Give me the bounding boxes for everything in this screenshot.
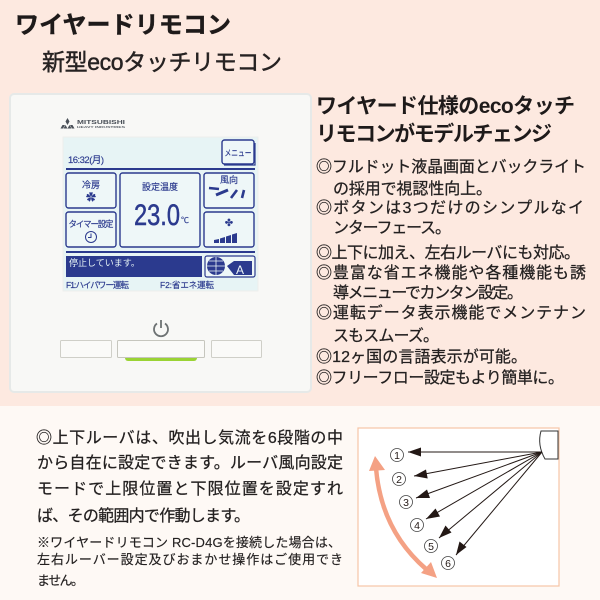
menu button: メニュー: [224, 148, 252, 158]
louver description: [36, 429, 343, 525]
LCD screen: [63, 137, 258, 291]
status message: [66, 256, 202, 277]
language button: A: [236, 263, 244, 277]
cooling button: [66, 173, 116, 208]
status message: 停止しています。: [69, 257, 140, 268]
feature list: ◎ボタンは3つだけのシンプルなイ: [316, 199, 584, 217]
feature list: スもスムーズ。: [333, 327, 439, 345]
indoor unit: [540, 431, 558, 459]
louver description: ◎上下ルーバは、吹出し気流を6段階の中: [36, 429, 343, 447]
feature list: [316, 158, 586, 387]
air direction button: 風向: [220, 174, 238, 185]
set temperature: 設定温度: [142, 181, 178, 192]
note: [37, 535, 343, 588]
feature list: ◎12ヶ国の言語表示が可能。: [316, 348, 527, 366]
brand logo: [60, 118, 126, 129]
top background: [0, 0, 600, 406]
title: ワイヤードリモコン: [15, 12, 231, 39]
hardware buttons: [60, 340, 262, 361]
feature list: の採用で視認性向上。: [333, 180, 492, 198]
note: 左右ルーバー設定及びおまかせ操作はご使用でき: [37, 552, 343, 567]
louver description: ば、その範囲内で作動します。: [37, 507, 250, 525]
diagram frame: [358, 428, 559, 586]
range double arrow: [369, 456, 437, 578]
position numbers: 4: [414, 520, 420, 532]
feature heading: リモコンがモデルチェンジ: [316, 122, 552, 146]
LCD screen: F2:省エネ運転: [160, 280, 214, 290]
position numbers: 3: [403, 497, 409, 509]
brand logo: HEAVY INDUSTRIES: [77, 125, 125, 129]
feature list: ◎フルドット液晶画面とバックライト: [316, 158, 586, 176]
louver diagram: [358, 428, 559, 586]
timer button: タイマー設定: [68, 219, 114, 229]
brand logo: MITSUBISHI: [77, 120, 126, 126]
language button: [205, 256, 255, 277]
note: ません。: [37, 573, 84, 588]
panel: remote controller: [10, 94, 311, 392]
louver description: から自在に設定できます。ルーバ風向設定: [37, 454, 343, 472]
position numbers: 5: [428, 541, 434, 553]
position numbers: 6: [445, 558, 451, 570]
louver description: モードで上限位置と下限位置を設定すれ: [37, 480, 343, 498]
fan speed button: [204, 212, 254, 247]
menu button: [222, 140, 255, 165]
fan speed button: ✤: [225, 218, 233, 229]
cooling button: ✿: [86, 192, 96, 204]
timer button: [66, 212, 116, 247]
feature heading: [316, 95, 575, 146]
note: ※ワイヤードリモコン RC-D4Gを接続した場合は、: [37, 535, 341, 550]
feature list: ◎フリーフロー設定もより簡単に。: [316, 369, 564, 387]
feature heading: ワイヤード仕様のecoタッチ: [316, 95, 575, 118]
feature list: ◎上下に加え、左右ルーバにも対応。: [316, 244, 580, 262]
subtitle: 新型ecoタッチリモコン: [42, 49, 282, 75]
position numbers: 1: [394, 450, 400, 462]
feature list: 導メニューでカンタン設定。: [333, 283, 523, 302]
remote body: [10, 94, 311, 392]
set temperature: ℃: [181, 216, 189, 225]
airflow arrows: [408, 448, 542, 555]
position numbers: [390, 448, 454, 570]
feature list: ◎豊富な省エネ機能や各種機能も誘: [316, 264, 586, 282]
icon: power: [154, 320, 168, 336]
clock: 16:32(月): [68, 155, 104, 166]
function key labels: F1:ハイパワー運転: [66, 280, 129, 290]
set temperature: [120, 173, 200, 247]
cooling button: 冷房: [82, 179, 100, 190]
bottom background: [0, 406, 600, 600]
air direction button: [204, 173, 254, 208]
feature list: ◎運転データ表示機能でメンテナン: [316, 303, 586, 322]
feature list: ンターフェース。: [333, 219, 451, 237]
set temperature: 23.0: [134, 199, 180, 232]
position numbers: 2: [396, 474, 402, 486]
